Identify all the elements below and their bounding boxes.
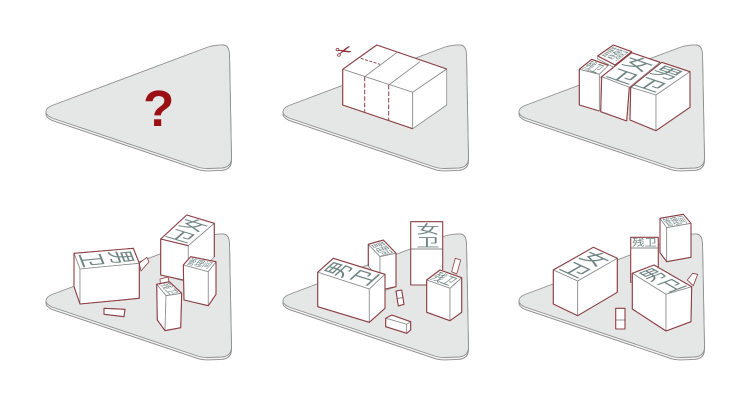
- block: middle: 残卫: [632, 237, 657, 249]
- block: upright panel: 女: [416, 223, 440, 236]
- block: tall top right: [161, 215, 214, 282]
- block: right: 男: [646, 63, 688, 83]
- small tab: [452, 258, 461, 274]
- block: narrow front: [156, 282, 182, 331]
- block: back small: 管理间: [598, 45, 631, 63]
- panel 6: scattered blocks: [519, 214, 704, 360]
- small flat block: [386, 315, 411, 333]
- panel 3: four adjoining blocks: [519, 45, 704, 171]
- small upright block: [616, 308, 625, 329]
- platform 1: [46, 45, 231, 171]
- block: wide left: 男: [103, 249, 139, 265]
- panel 4: scattered blocks: [46, 215, 231, 360]
- block: wide left: 女: [574, 248, 616, 269]
- small flat block: [104, 308, 125, 317]
- block: right: [183, 256, 216, 306]
- block: tall back right: 管理间: [661, 214, 689, 228]
- block: left small: 残卫: [579, 59, 608, 75]
- block: wide left: [553, 247, 617, 316]
- block: front right: 卫: [654, 277, 692, 295]
- block: tall top right: 女: [175, 216, 213, 235]
- platform 4: [46, 234, 231, 360]
- block: right: 管理间: [184, 256, 215, 270]
- platform 6: [519, 234, 704, 360]
- block: tall back: 管理间: [368, 241, 395, 257]
- block: wide left: 卫: [73, 252, 109, 268]
- block: narrow front: 残卫: [156, 282, 182, 296]
- panel 5: scattered blocks: [283, 222, 468, 360]
- block: wide front left: 卫: [344, 267, 385, 288]
- block: tall top right: 卫: [162, 227, 200, 246]
- panel 1: question mark: [46, 45, 231, 171]
- platform 5: [283, 234, 468, 360]
- block: right: 残卫: [427, 270, 461, 288]
- icon: scissors: ✂: [333, 37, 355, 65]
- box to be cut: [343, 45, 447, 129]
- small tab: [139, 257, 149, 271]
- block: upright panel: [411, 222, 443, 285]
- icon: question mark: ?: [143, 80, 174, 137]
- small hidden block: [160, 277, 169, 285]
- block: tall back: [368, 240, 396, 292]
- block: right: 卫: [629, 75, 671, 95]
- block: upright panel: 卫: [416, 236, 440, 249]
- block: wide left: 卫: [554, 259, 596, 281]
- block: left small: [579, 59, 608, 111]
- block: middle: 卫: [602, 66, 643, 87]
- block: wide front left: [318, 258, 385, 322]
- block: right: [427, 270, 462, 321]
- small tab: [687, 273, 698, 286]
- block: right: [629, 62, 690, 131]
- platform 3: [519, 45, 704, 171]
- platform 2: [283, 45, 468, 171]
- block: front right: [632, 265, 692, 331]
- block: wide front left: 男: [319, 259, 359, 280]
- small upright block: [396, 290, 404, 306]
- block: middle: [631, 237, 658, 283]
- block: middle: 女: [617, 53, 659, 75]
- block: wide left: [73, 248, 139, 304]
- panel 2: box with cut lines: [283, 37, 468, 171]
- block: tall back right: [660, 214, 691, 262]
- block: middle: [601, 53, 660, 121]
- block: front right: 男: [635, 266, 673, 284]
